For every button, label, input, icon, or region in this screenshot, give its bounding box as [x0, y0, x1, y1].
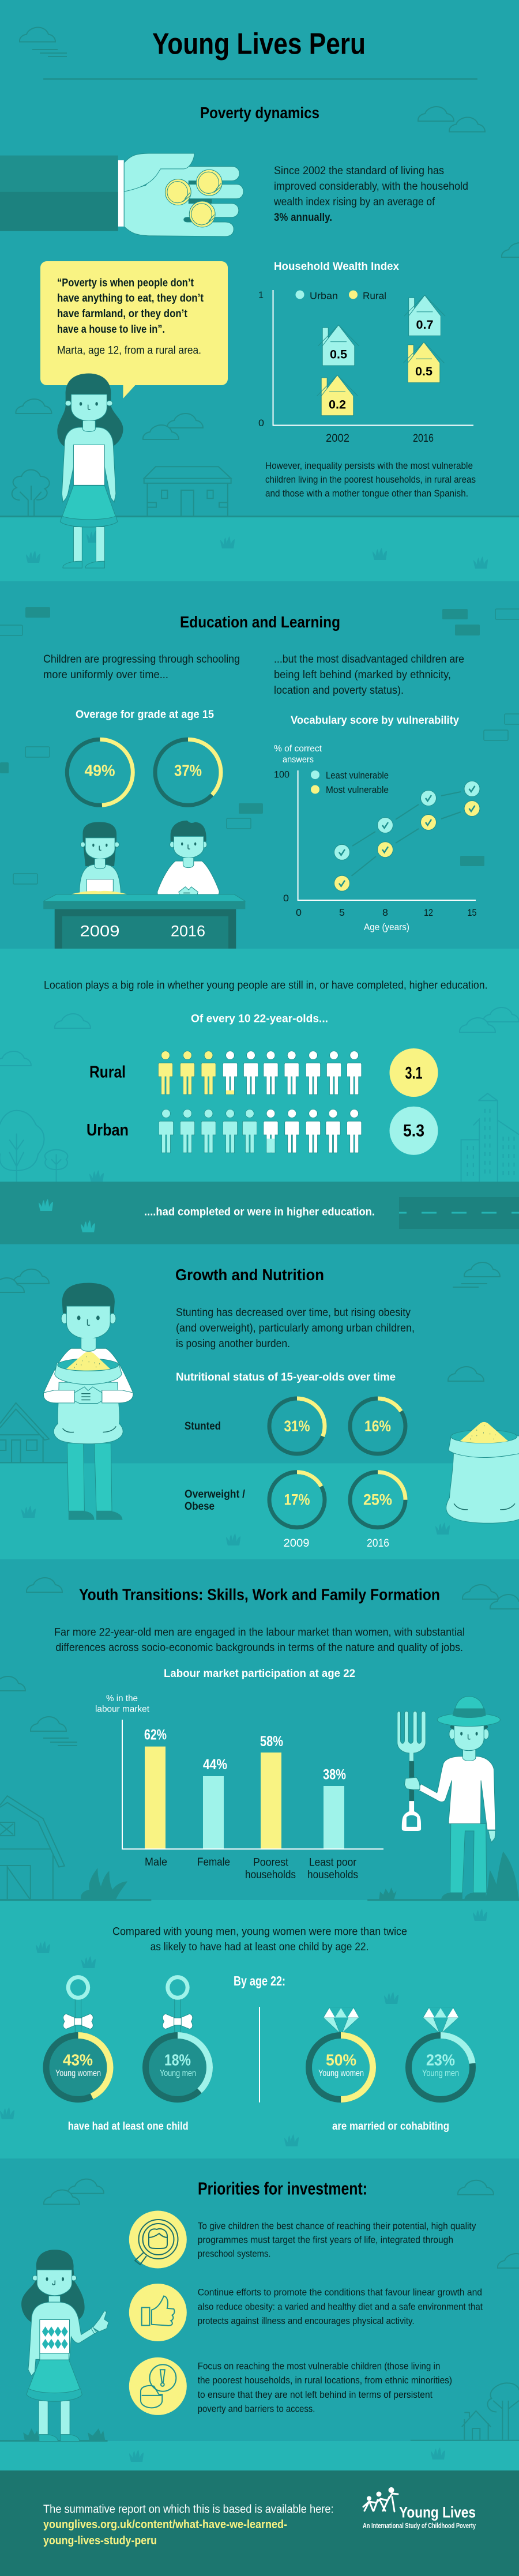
- text: disadvantaged children: being left behind (marked by ethnicity,: [274, 669, 451, 681]
- markers: most vulnerable: [334, 800, 480, 891]
- background house: [0, 1403, 68, 1462]
- ground strip: [0, 517, 519, 581]
- girl student: [66, 822, 133, 899]
- chart: household wealth index: [258, 261, 473, 445]
- ground strip: [0, 1900, 519, 2158]
- chart: household wealth index: 1: [258, 289, 264, 300]
- title divider: [43, 78, 477, 80]
- text: standard of living: wealth index rising by an average of: [273, 196, 435, 208]
- subheading: by age 22: By age 22:: [234, 1973, 285, 1988]
- text: stunting decreased: [176, 1307, 415, 1350]
- donut: overweight 2016: 25%: [363, 1491, 392, 1509]
- illustration: girl pointing: [21, 2250, 108, 2442]
- row label: stunted: Stunted: [185, 1420, 221, 1432]
- ring chart: young men child: [145, 1977, 210, 2099]
- text: priority 2: protects against illness and encourages physical activity.: [198, 2315, 415, 2326]
- boy student: [157, 821, 219, 898]
- chart: vocabulary score: 5: [339, 907, 345, 918]
- panel: growth and nutrition: [0, 1244, 519, 1559]
- icon: thumbs up: [129, 2284, 187, 2341]
- text: priority 1: To give children the best chance of reaching their potential, high quality: [198, 2220, 476, 2231]
- house marker: 2002 urban: 0.5: [330, 348, 347, 362]
- icon: magnifying glass over child: [129, 2211, 187, 2269]
- chart: vocabulary score: 0: [283, 893, 289, 904]
- text: standard of living: Since 2002 the standard of living has: [274, 165, 444, 177]
- ring chart: young women married: Young women: [318, 2069, 364, 2078]
- text: young women compared: [112, 1926, 407, 1953]
- illustration: students at desk: [43, 821, 245, 949]
- background barn and tall grass: [0, 1796, 519, 1900]
- illustration: grain sack: [446, 1422, 519, 1523]
- legend: Least vulnerable: [326, 770, 389, 781]
- year labels on desk: [80, 923, 205, 940]
- category labels: Least poor: [309, 1857, 357, 1869]
- value labels: 38%: [323, 1767, 346, 1783]
- background clouds: [0, 1007, 519, 1066]
- text: priority 2: [198, 2287, 483, 2326]
- house marker: 2002 urban: [318, 325, 359, 366]
- chart: vocabulary score: 15: [467, 907, 476, 918]
- text: inequality persists: However, inequality persists with the most vulnerable: [265, 460, 473, 471]
- house marker: 2016 urban: 0.7: [416, 318, 434, 332]
- text: young women compared: Compared with young men, young women were more than twice: [112, 1926, 407, 1938]
- icon: rattle: [63, 1977, 93, 2033]
- row label: overweight obese: Obese: [185, 1501, 215, 1513]
- chart: household wealth index: 2016: [413, 433, 434, 445]
- year labels: 2016: [367, 1537, 389, 1550]
- logo: young lives: [363, 2488, 476, 2530]
- y-axis title: % of correct: [274, 744, 322, 754]
- donut: stunted 2016: [350, 1398, 405, 1454]
- donut: stunted 2009: 31%: [284, 1417, 310, 1435]
- text: stunting decreased: Stunting has decreased over time, but rising obesity: [176, 1307, 411, 1319]
- legend: Urban: [310, 291, 338, 301]
- y-axis title: answers: [283, 755, 314, 765]
- background bricks: [0, 607, 519, 884]
- axes: [122, 1720, 383, 1849]
- text: progressing through schooling: more uniformly over time...: [43, 669, 168, 681]
- text: inequality persists: and those with a mother tongue other than Spanish.: [265, 488, 468, 499]
- logo figures: [363, 2488, 398, 2511]
- value labels: [144, 1727, 346, 1783]
- chart: vocabulary score: 12: [424, 907, 433, 918]
- year labels on desk: 2009: [80, 923, 120, 940]
- caption: at least one child: have had at least one child: [68, 2120, 189, 2133]
- ground strip: [0, 2441, 519, 2470]
- year labels on desk: 2016: [171, 923, 205, 940]
- row: urban pictogram: 5.3: [403, 1122, 424, 1141]
- background trees and buildings: [0, 1093, 519, 1182]
- text: priority 3: to ensure that they are not left behind in terms of persistent: [198, 2389, 432, 2400]
- category labels: households: [307, 1869, 358, 1881]
- background clouds: [0, 1578, 519, 1746]
- ring chart: young women married: [309, 2007, 373, 2099]
- title: Young Lives Peru: [152, 28, 366, 61]
- road band: [0, 1182, 519, 1244]
- text: progressing through schooling: [43, 653, 240, 681]
- house marker: 2016 urban: [404, 295, 445, 336]
- callout: quote bubble: [40, 261, 228, 398]
- row: urban pictogram: [86, 1107, 438, 1155]
- ring chart: young women child: 43%: [63, 2051, 93, 2069]
- legend: Rural: [363, 291, 386, 301]
- chart: vocabulary score: 8: [382, 907, 388, 918]
- y-axis title: [274, 744, 322, 765]
- text: priority 1: programmes must target the first years of life, integrated through: [198, 2235, 453, 2246]
- grass: [21, 1506, 450, 1545]
- category labels: Male: [145, 1856, 167, 1868]
- ring chart: young women married: 50%: [326, 2051, 356, 2069]
- heading: growth and nutrition: Growth and Nutrition: [175, 1266, 324, 1284]
- caption: married or cohabiting: are married or cohabiting: [332, 2120, 449, 2133]
- text: stunting decreased: (and overweight), particularly among urban children,: [176, 1322, 415, 1334]
- chart: vocabulary score: Age (years): [364, 922, 409, 932]
- background house, tree and grass: [0, 2383, 519, 2440]
- ring chart: young men married: 23%: [426, 2051, 455, 2069]
- subheading: of every 10: Of every 10 22-year-olds...: [191, 1013, 328, 1025]
- ring chart: young men child: 18%: [164, 2051, 191, 2069]
- heading: poverty dynamics: Poverty dynamics: [200, 104, 319, 122]
- background tree and house: [0, 467, 519, 517]
- panel: priorities for investment: [0, 2158, 519, 2470]
- text: priority 2: also reduce obesity: a varied and healthy diet and a safe environment that: [198, 2302, 483, 2312]
- house marker: 2016 rural: [403, 342, 445, 383]
- row: rural pictogram: 3.1: [405, 1064, 422, 1083]
- bar chart: labour market participation: [95, 1668, 383, 1881]
- category labels: Poorest: [253, 1857, 289, 1869]
- ground grass: [26, 531, 488, 569]
- ring chart: young women child: [46, 1977, 110, 2099]
- text: young women compared: as likely to have had at least one child by age 22.: [151, 1941, 368, 1953]
- category labels: Female: [197, 1856, 230, 1868]
- text: labour market intro: Far more 22-year-old men are engaged in the labour market than women, with substantial: [54, 1626, 465, 1638]
- text: disadvantaged children: [274, 653, 464, 697]
- text: disadvantaged children: ...but the most disadvantaged children are: [274, 653, 464, 665]
- text: labour market intro: differences across socio-economic backgrounds in terms of the nature and quality of jobs.: [55, 1642, 463, 1654]
- text: standard of living: improved considerably, with the household: [274, 180, 468, 193]
- chart: household wealth index: 2002: [326, 433, 349, 445]
- illustration: boy with sack: [43, 1283, 133, 1520]
- axes: [298, 770, 476, 900]
- road band: ....had completed or were in higher education.: [144, 1206, 375, 1218]
- text: location role: Location plays a big role in whether young people are still in, or have completed, higher education.: [44, 980, 488, 992]
- year labels: [284, 1537, 389, 1550]
- callout: quote bubble: have farmland, or they don’t: [57, 308, 188, 320]
- chart axes: [273, 290, 473, 426]
- text: priority 3: the poorest households, in rural locations, from ethnic minorities): [198, 2375, 452, 2386]
- donut: stunted 2009: [269, 1398, 325, 1454]
- donut: overweight 2009: 17%: [284, 1491, 310, 1509]
- row: rural pictogram: [89, 1048, 438, 1097]
- panel: poverty dynamics: [0, 0, 519, 581]
- value labels: 62%: [144, 1727, 167, 1743]
- icon: diamond: [324, 2007, 359, 2033]
- bars: [145, 1747, 344, 1849]
- illustration: farmer with fork: [397, 1697, 500, 1900]
- donut: 2016 overage: [155, 739, 221, 805]
- background clouds: [44, 2179, 519, 2268]
- text: priority 2: Continue efforts to promote the conditions that favour linear growth and: [198, 2287, 482, 2298]
- house marker: 2002 rural: 0.2: [329, 398, 346, 411]
- text: disadvantaged children: location and poverty status).: [274, 685, 404, 697]
- ground grass: [129, 2447, 445, 2462]
- y-axis title: % in the: [106, 1694, 138, 1703]
- connecting lines: [352, 792, 461, 876]
- chart: vocabulary score: 0: [296, 907, 302, 918]
- y-axis title: labour market: [95, 1705, 150, 1714]
- text: standard of living: [273, 165, 468, 224]
- ring chart: young men married: [408, 2007, 473, 2099]
- text: labour market intro: [54, 1626, 465, 1654]
- house marker: 2002 rural: [317, 375, 358, 416]
- ring chart: young men married: Young men: [422, 2069, 459, 2078]
- callout: quote bubble: “Poverty is when people don’t: [57, 277, 194, 289]
- chart: household wealth index: 0: [258, 418, 264, 428]
- y-axis title: [95, 1694, 150, 1714]
- ground grass: [0, 1909, 487, 2146]
- legend: Most vulnerable: [326, 784, 389, 795]
- background clouds: [0, 1262, 500, 1381]
- chart title: Vocabulary score by vulnerability: [291, 714, 459, 727]
- donut: overweight 2009: [269, 1472, 325, 1528]
- category labels: [145, 1856, 358, 1881]
- category labels: households: [245, 1869, 296, 1881]
- callout: quote bubble: have a house to live in”.: [57, 324, 165, 336]
- callout: quote bubble: have anything to eat, they don’t: [57, 292, 204, 304]
- logo: young lives: Young Lives: [399, 2504, 476, 2521]
- panel: youth transitions: [0, 1559, 519, 2158]
- markers: least vulnerable: [334, 781, 480, 860]
- ring chart: young women child: Young women: [55, 2069, 101, 2078]
- text: priority 3: [198, 2361, 452, 2414]
- legend: [311, 770, 389, 795]
- panel: footer: [0, 2470, 519, 2576]
- donut: stunted 2016: 16%: [364, 1417, 391, 1435]
- text: stunting decreased: is posing another burden.: [176, 1338, 290, 1350]
- grass: [89, 1170, 104, 1182]
- row label: overweight obese: Overweight /: [185, 1488, 246, 1501]
- heading: education and learning: Education and Learning: [180, 613, 340, 631]
- row: urban pictogram: Urban: [86, 1121, 129, 1140]
- chart title: Labour market participation at age 22: [164, 1668, 355, 1680]
- ground strip: [0, 1464, 519, 1559]
- value labels: 44%: [203, 1757, 227, 1773]
- chart: vocabulary score: [274, 714, 480, 932]
- heading: youth transitions: Youth Transitions: Skills, Work and Family Formation: [79, 1586, 440, 1604]
- illustration: girl Marta: [57, 373, 123, 568]
- text: priority 1: preschool systems.: [198, 2248, 271, 2259]
- text: report link: younglives.org.uk/content/what-have-we-learned-: [43, 2518, 287, 2531]
- value labels: 58%: [260, 1733, 283, 1750]
- ring chart: young men child: Young men: [160, 2069, 196, 2078]
- chart title: Household Wealth Index: [274, 261, 399, 273]
- year labels: 2009: [284, 1537, 309, 1550]
- text: inequality persists: children living in the poorest households, in rural areas: [265, 474, 476, 485]
- icon: child with exclamation bubble: [129, 2357, 187, 2415]
- text: progressing through schooling: Children are progressing through schooling: [43, 653, 240, 665]
- icon: hand holding coins: [0, 153, 243, 236]
- background clouds: [16, 28, 519, 439]
- panel: location and higher education: [0, 949, 519, 1244]
- text: report link: young-lives-study-peru: [43, 2534, 157, 2547]
- divider between ring groups: [259, 2007, 260, 2103]
- text: report link: The summative report on which this is based is available here:: [43, 2503, 334, 2515]
- donut: overweight 2016: [350, 1472, 405, 1528]
- donut: 2016 overage: 37%: [174, 762, 202, 780]
- icon: diamond: [423, 2007, 458, 2033]
- heading: priorities: Priorities for investment:: [198, 2179, 367, 2199]
- logo: young lives: An International Study of Childhood Poverty: [363, 2522, 476, 2530]
- legend: [295, 291, 386, 301]
- house marker: 2016 rural: 0.5: [415, 365, 432, 378]
- donut: 2009 overage: 49%: [84, 762, 115, 780]
- text: report link: [43, 2503, 334, 2547]
- text: standard of living: 3% annually.: [274, 212, 332, 224]
- row label: overweight obese: [185, 1488, 246, 1513]
- panel: education and learning: [0, 581, 519, 949]
- heading: overage for grade: Overage for grade at age 15: [76, 709, 214, 721]
- callout: quote bubble: Marta, age 12, from a rural area.: [57, 345, 201, 356]
- icon: rattle: [163, 1977, 193, 2033]
- chart: vocabulary score: 100: [274, 769, 289, 780]
- subheading: nutritional status: Nutritional status of 15-year-olds over time: [176, 1371, 396, 1383]
- row: rural pictogram: Rural: [89, 1063, 126, 1082]
- text: priority 3: poverty and barriers to access.: [198, 2404, 315, 2414]
- text: inequality persists: [265, 460, 476, 499]
- donut: 2009 overage: [67, 739, 133, 805]
- text: priority 1: [198, 2220, 476, 2259]
- desk: [43, 894, 245, 949]
- text: priority 3: Focus on reaching the most vulnerable children (those living in: [198, 2361, 440, 2372]
